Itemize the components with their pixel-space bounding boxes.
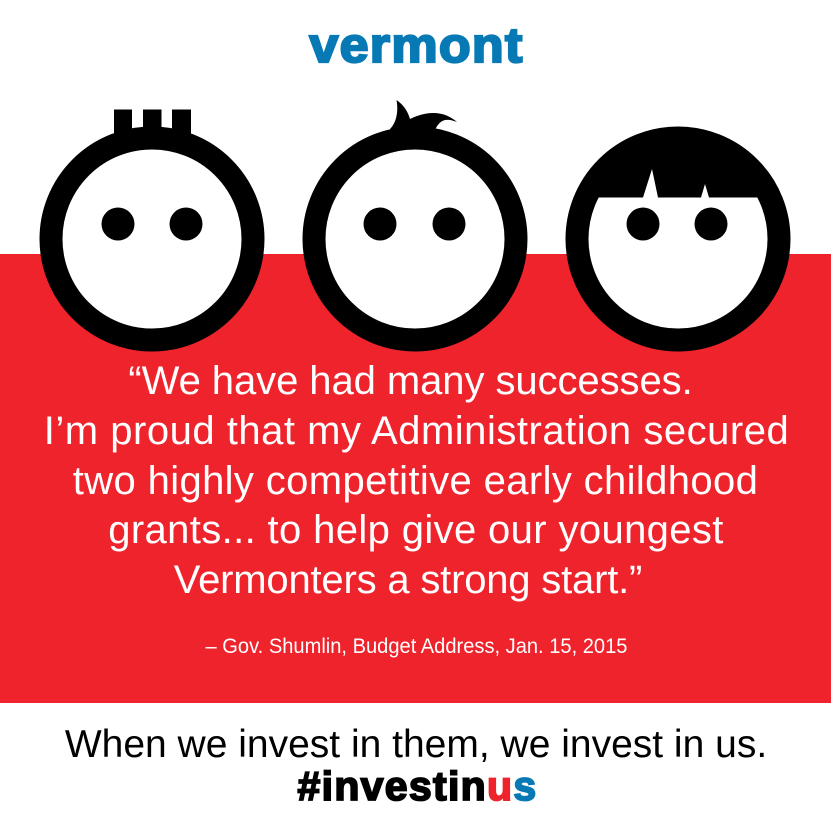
- face 1: child with spiky crown hair: [51, 110, 253, 340]
- quote attribution: – Gov. Shumlin, Budget Address, Jan. 15, 2015: [206, 635, 627, 658]
- quote text: [44, 359, 789, 602]
- face 3: child with fringe: [577, 138, 779, 340]
- quote text: Vermonters a strong start.”: [174, 558, 642, 602]
- red background panel: [0, 254, 831, 703]
- face 2: child with hair tuft: [314, 100, 516, 340]
- title: vermont: vermont: [309, 19, 524, 73]
- illustration: three child faces: [40, 100, 790, 352]
- quote text: “We have had many successes.: [128, 359, 693, 403]
- quote text: grants... to help give our youngest: [108, 508, 724, 552]
- quote text: I’m proud that my Administration secured: [44, 409, 789, 453]
- tagline: When we invest in them, we invest in us.: [65, 723, 767, 766]
- quote text: two highly competitive early childhood: [73, 459, 758, 503]
- hashtag: #investinus: [298, 763, 537, 809]
